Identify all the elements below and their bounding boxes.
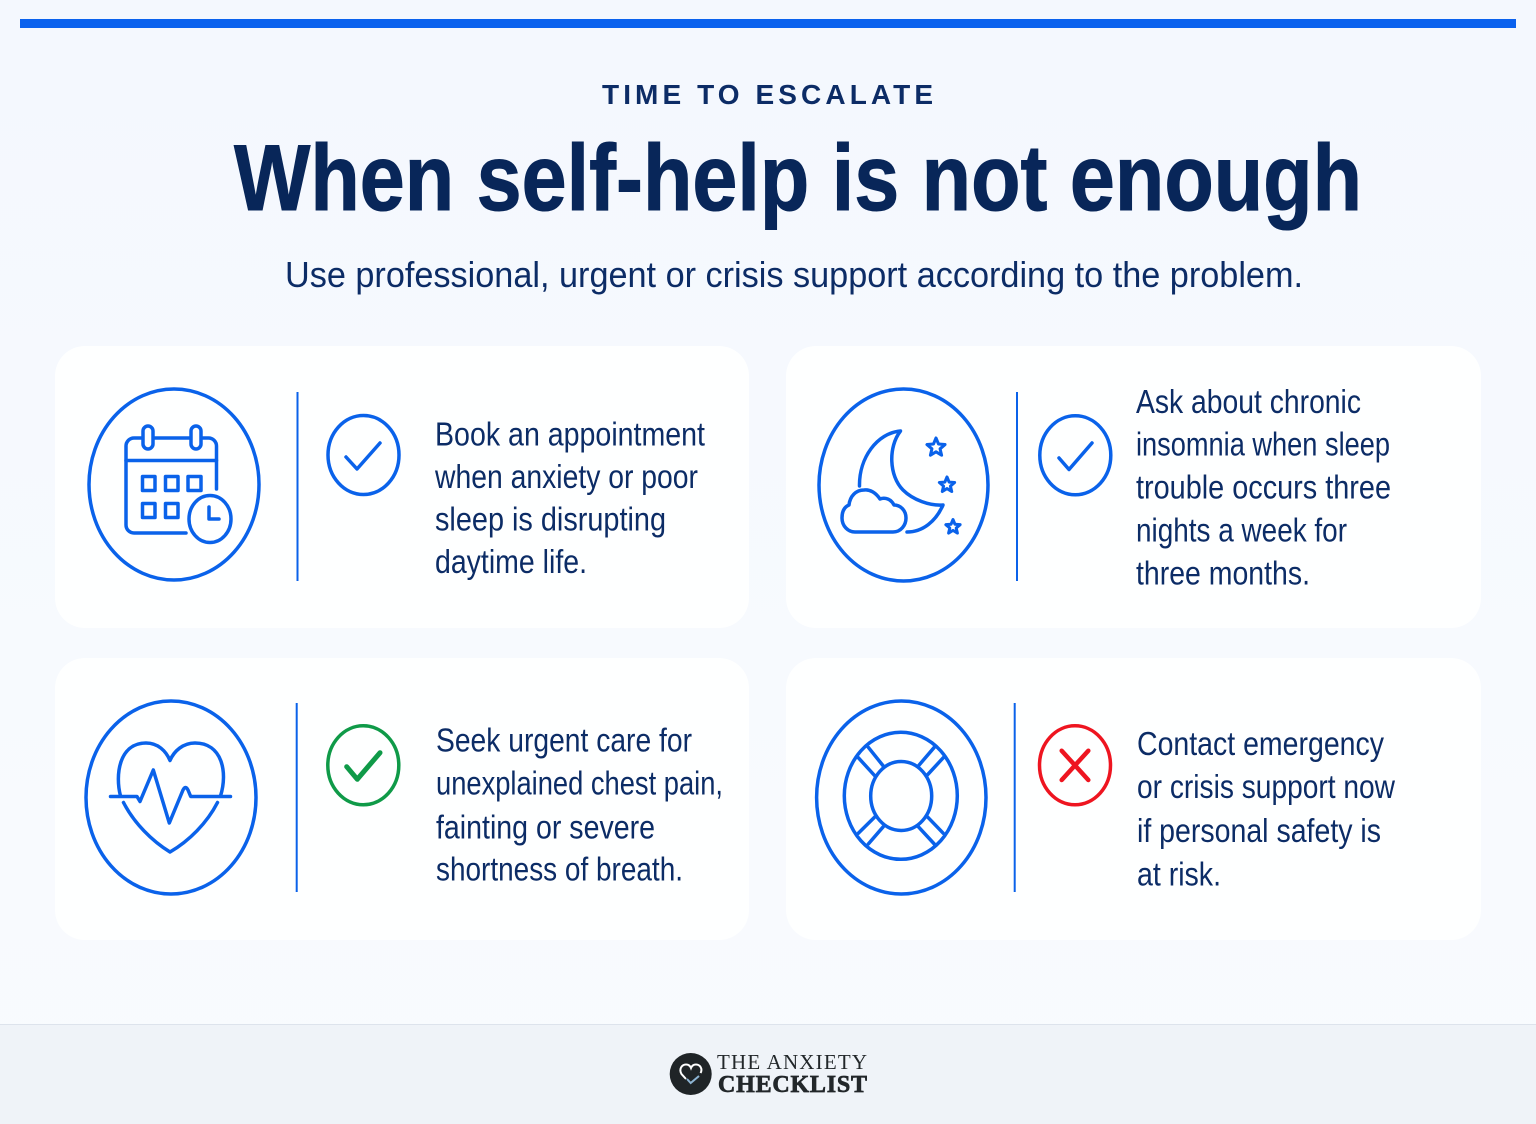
- text: emergency advice: [1137, 725, 1395, 892]
- icon: moon, cloud and stars: [819, 389, 988, 581]
- text: insomnia advice: insomnia when sleep: [1136, 426, 1390, 462]
- icon: blue check: [328, 416, 399, 494]
- icon: logo heart check: [670, 1053, 712, 1095]
- text: urgent care advice: unexplained chest pain,: [436, 764, 723, 802]
- panel: emergency support: [786, 658, 1481, 940]
- text: insomnia advice: three months.: [1136, 554, 1310, 592]
- text: appointment advice: when anxiety or poor: [434, 458, 698, 495]
- icon: blue check: [1040, 416, 1111, 495]
- text: insomnia advice: [1136, 383, 1391, 592]
- text: urgent care advice: [436, 722, 723, 888]
- icon: green check: [328, 726, 399, 805]
- icon: red cross: [1040, 726, 1110, 805]
- text: appointment advice: [434, 416, 705, 580]
- footer: [0, 1024, 1536, 1124]
- icon: lifebuoy: [817, 701, 986, 894]
- panel: chronic insomnia: [786, 346, 1481, 628]
- text: urgent care advice: shortness of breath.: [436, 850, 683, 888]
- text: emergency advice: at risk.: [1137, 856, 1221, 892]
- eyebrow: TIME TO ESCALATE: [602, 79, 933, 110]
- icon: calendar with clock: [89, 389, 259, 580]
- text: insomnia advice: nights a week for: [1136, 512, 1347, 548]
- panel: book an appointment: [55, 346, 749, 628]
- text: appointment advice: Book an appointment: [435, 416, 705, 452]
- logo wordmark: THE ANXIETY: [717, 1050, 867, 1074]
- text: appointment advice: daytime life.: [435, 543, 587, 580]
- icon: heart with pulse: [86, 701, 256, 894]
- logo wordmark: [717, 1050, 867, 1098]
- text: emergency advice: if personal safety is: [1137, 812, 1381, 849]
- panel: urgent care: [55, 658, 749, 940]
- text: appointment advice: sleep is disrupting: [435, 500, 666, 538]
- logo wordmark: CHECKLIST: [718, 1072, 867, 1098]
- text: urgent care advice: Seek urgent care for: [436, 722, 692, 758]
- text: emergency advice: Contact emergency: [1137, 725, 1384, 762]
- subtitle: Use professional, urgent or crisis support according to the problem.: [285, 254, 1303, 295]
- text: emergency advice: or crisis support now: [1137, 768, 1395, 805]
- title: When self-help is not enough: [234, 125, 1362, 230]
- text: insomnia advice: trouble occurs three: [1136, 468, 1391, 506]
- top accent bar: [20, 19, 1516, 28]
- text: urgent care advice: fainting or severe: [436, 808, 655, 846]
- text: insomnia advice: Ask about chronic: [1136, 383, 1361, 420]
